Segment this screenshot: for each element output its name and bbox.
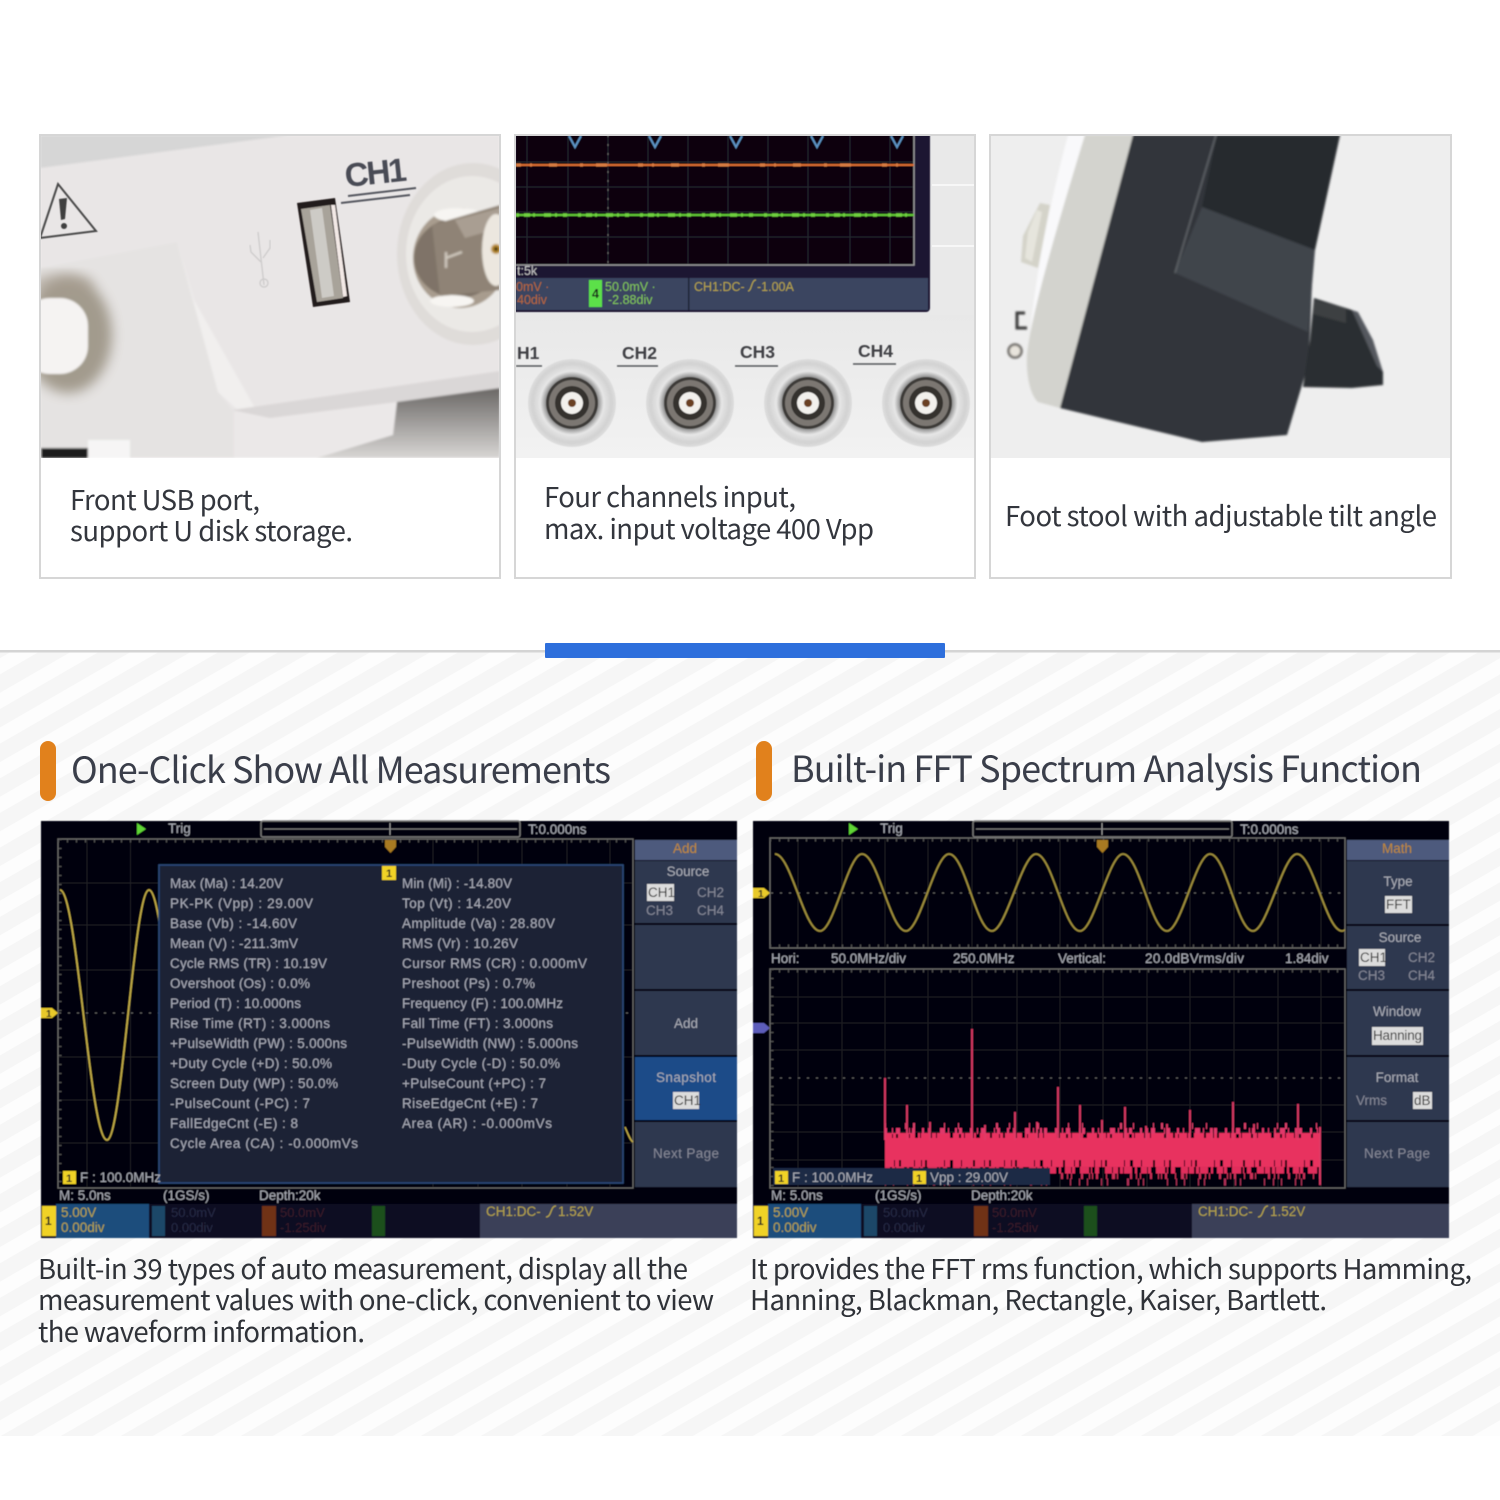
top status row: T:0.000ns (528, 822, 587, 837)
frequency readout: F : 100.0MHz (80, 1170, 161, 1185)
markers (753, 840, 1108, 1033)
caption: USB (70, 478, 353, 549)
description: measurements (38, 1247, 714, 1350)
description: measurements: measurement values with one-click, convenient to view (38, 1278, 714, 1318)
channel marker (41, 1008, 58, 1020)
FFT readout (773, 1168, 1050, 1185)
sample row: (1GS/s) (875, 1188, 922, 1203)
channel status bar: 1.52V (1270, 1204, 1305, 1219)
side menu: Math: Vrms (1356, 1093, 1387, 1108)
channel status bar: 1 (45, 1214, 52, 1228)
side menu: Math: Format (1376, 1070, 1419, 1085)
trigger marker (385, 840, 396, 853)
measurements: left column: +Duty Cycle (+D) : 50.0% (170, 1056, 332, 1071)
panel: foot stool (990, 135, 1451, 578)
measurements: left column: PK-PK (Vpp) : 29.00V (170, 896, 313, 911)
measurements: left column: Period (T) : 10.000ns (170, 996, 301, 1011)
description: measurements: Built-in 39 types of auto measurement, display all the (38, 1247, 688, 1287)
screen (510, 130, 930, 312)
side menu: Add: Add (674, 1016, 698, 1031)
measurement panel (159, 865, 623, 1183)
striped lower section (0, 652, 1500, 1436)
side menu: Math: Math (1382, 841, 1412, 856)
channel status bar: 1.52V (558, 1204, 593, 1219)
measurements: left column: Max (Ma) : 14.20V (170, 876, 283, 891)
side menu: Math: Next Page (1364, 1146, 1430, 1161)
description: FFT: It provides the FFT rms function, which supports Hamming, (750, 1247, 1472, 1287)
channel status bar: 0.00div (171, 1220, 213, 1235)
measurements: right column: +PulseCount (+PC) : 7 (402, 1076, 546, 1091)
measurements: left column: Base (Vb) : -14.60V (170, 916, 297, 931)
measurements: right column: -PulseWidth (NW) : 5.000ns (402, 1036, 578, 1051)
side menu: Math: Source (1379, 930, 1421, 945)
status readout (516, 264, 794, 307)
measurements: right column: Min (Mi) : -14.80V (402, 876, 512, 891)
waveform grid (58, 839, 633, 1188)
FFT readout: 1 (916, 1173, 922, 1185)
connector labels: CH2 (622, 343, 657, 363)
connector labels (516, 341, 896, 366)
status readout: 50.0mV · (605, 280, 656, 294)
measurements: right column: Area (AR) : -0.000mVs (402, 1116, 552, 1131)
frequency readout: 1 (66, 1173, 72, 1185)
measurements: right column: Amplitude (Va) : 28.80V (402, 916, 555, 931)
FFT scale row: Vertical: (1058, 951, 1106, 966)
channel status bar: 50.0mV (280, 1205, 325, 1220)
FFT scale row: Hori: (771, 951, 800, 966)
side menu: Add: CH2 (697, 885, 724, 900)
description: measurements: the waveform information. (38, 1310, 365, 1350)
measurements: right column: Preshoot (Ps) : 0.7% (402, 976, 535, 991)
measurements: left column: FallEdgeCnt (-E) : 8 (170, 1116, 298, 1131)
top status row (849, 821, 1299, 837)
caption: channels: max. input voltage 400 Vpp (544, 507, 874, 547)
side menu: Add: CH1 (648, 885, 675, 900)
USB socket (297, 198, 350, 307)
status readout: 0mV · (516, 280, 549, 294)
FFT readout: 1 (778, 1173, 784, 1185)
FFT scale row: 1.84div (1285, 951, 1329, 966)
top status row: Trig (168, 821, 191, 836)
status readout: -2.88div (608, 293, 653, 307)
caption: foot stool: Foot stool with adjustable tilt angle (1005, 494, 1437, 534)
side menu: Math: FFT (1386, 897, 1411, 912)
icon: USB symbol (250, 232, 270, 287)
screen: measurements (41, 821, 737, 1238)
side menu: Add: Snapshot (656, 1070, 716, 1085)
side menu: Add: Next Page (653, 1146, 719, 1161)
side menu: Add (635, 840, 737, 1187)
FFT scale row: 250.0MHz (953, 951, 1015, 966)
measurements: left column: -PulseCount (-PC) : 7 (170, 1096, 310, 1111)
measurements: right column: -Duty Cycle (-D) : 50.0% (402, 1056, 560, 1071)
sample row: M: 5.0ns (771, 1188, 823, 1203)
measurements: left column (170, 876, 358, 1151)
side menu: Add: Add (673, 841, 697, 856)
measurement panel: 1 (386, 868, 392, 880)
sample row (771, 1188, 1033, 1203)
upper waveform frame (770, 838, 1345, 948)
measurements: right column: Top (Vt) : 14.20V (402, 896, 511, 911)
side menu: Add: CH3 (646, 903, 673, 918)
connector labels: H1 (517, 343, 540, 363)
sample row: (1GS/s) (163, 1188, 210, 1203)
sample row: M: 5.0ns (59, 1188, 111, 1203)
measurements: right column: Fall Time (FT) : 3.000ns (402, 1016, 553, 1031)
channel status bar: 0.00div (883, 1220, 925, 1235)
orange trace (516, 164, 914, 166)
BNC connector (398, 164, 499, 344)
measurements: left column: Rise Time (RT) : 3.000ns (170, 1016, 330, 1031)
sine waveform (59, 888, 160, 1142)
panel: front USB port (39, 134, 501, 579)
connectors (528, 359, 970, 447)
label: CH1: CH1 (343, 151, 408, 194)
lower spectrum frame (770, 969, 1345, 1188)
markers: 1 (758, 889, 764, 900)
connector labels: CH4 (858, 341, 893, 361)
photo: side view with foot stool (990, 135, 1451, 458)
side menu: Math: dB (1414, 1093, 1431, 1108)
sine waveform (775, 854, 1370, 931)
top status row: Trig (880, 821, 903, 836)
caption: USB: Front USB port, (70, 478, 260, 518)
channel status bar: 0.00div (61, 1220, 105, 1235)
panel: four channels (510, 130, 975, 578)
side menu: Math: CH3 (1358, 968, 1385, 983)
measurements: left column: Mean (V) : -211.3mV (170, 936, 298, 951)
channel status bar: 5.00V (61, 1205, 96, 1220)
connector labels: CH3 (740, 342, 775, 362)
caption: channels (544, 475, 874, 547)
channel status bar: 1 (757, 1214, 764, 1228)
screen: FFT (753, 821, 1449, 1238)
channel status bar: 50.0mV (171, 1205, 216, 1220)
measurements: right column: RiseEdgeCnt (+E) : 7 (402, 1096, 538, 1111)
caption: channels: Four channels input, (544, 475, 796, 515)
measurements: left column: Cycle Area (CA) : -0.000mVs (170, 1136, 358, 1151)
side menu: Math: CH1 (1360, 950, 1387, 965)
channel status bar: 50.0mV (992, 1205, 1037, 1220)
measurements: left column: +PulseWidth (PW) : 5.000ns (170, 1036, 347, 1051)
side menu: Math: Hanning (1373, 1028, 1422, 1043)
FFT readout: Vpp : 29.00V (930, 1170, 1008, 1185)
channel marker: 1 (46, 1009, 52, 1020)
side menu: Math (1347, 840, 1449, 1187)
measurements: right column: RMS (Vr) : 10.26V (402, 936, 518, 951)
heading: measurements: One-Click Show All Measurements (71, 742, 611, 794)
status readout: t:5k (517, 264, 538, 278)
channel markers (569, 136, 903, 147)
caption: USB: support U disk storage. (70, 509, 353, 549)
side menu: Math: Type (1383, 874, 1413, 889)
top status row: T:0.000ns (1240, 822, 1299, 837)
green trace (516, 214, 914, 216)
FFT scale row: 50.0MHz/div (831, 951, 906, 966)
section divider (0, 643, 1500, 658)
channel status bar: CH1:DC- (1198, 1204, 1253, 1219)
side menu: Math: Window (1373, 1004, 1421, 1019)
channel status bar: 50.0mV (883, 1205, 928, 1220)
side menu: Add: CH4 (697, 903, 724, 918)
channel status bar: CH1:DC- (486, 1204, 541, 1219)
description: FFT (750, 1247, 1472, 1318)
photo: scope screen and inputs (510, 130, 975, 458)
status readout: -1.00A (757, 280, 794, 294)
channel status bar: 0.00div (773, 1220, 817, 1235)
measurements: right column: Frequency (F) : 100.0MHz (402, 996, 563, 1011)
side menu: Math: CH2 (1408, 950, 1435, 965)
top status row (137, 821, 587, 837)
side menu: Add: Source (667, 864, 709, 879)
status readout: CH1:DC- (694, 280, 745, 294)
heading: FFT: Built-in FFT Spectrum Analysis Function (791, 741, 1422, 793)
FFT scale row (771, 951, 1329, 966)
status readout: 40div (517, 293, 548, 307)
FFT scale row: 20.0dBVrms/div (1145, 951, 1244, 966)
FFT spectrum (885, 1029, 1320, 1185)
measurements: left column: Screen Duty (WP) : 50.0% (170, 1076, 338, 1091)
channel status bar: -1.25div (280, 1220, 327, 1235)
channel status bar (753, 1204, 1449, 1238)
measurements: left column: Cycle RMS (TR) : 10.19V (170, 956, 327, 971)
channel status bar: -1.25div (992, 1220, 1039, 1235)
sample row: Depth:20k (259, 1188, 321, 1203)
sample row (59, 1188, 321, 1203)
FFT readout: F : 100.0MHz (792, 1170, 873, 1185)
status readout: 4 (592, 287, 599, 301)
side menu: Add: CH1 (674, 1093, 701, 1108)
measurements: right column (402, 876, 587, 1131)
description: FFT: Hanning, Blackman, Rectangle, Kaiser, Bartlett. (750, 1278, 1327, 1318)
measurements: left column: Overshoot (Os) : 0.0% (170, 976, 310, 991)
icon: warning triangle (40, 184, 96, 238)
sample row: Depth:20k (971, 1188, 1033, 1203)
channel status bar: 5.00V (773, 1205, 808, 1220)
channel status bar (41, 1204, 737, 1238)
photo: USB port close-up (41, 136, 499, 458)
measurements: right column: Cursor RMS (CR) : 0.000mV (402, 956, 587, 971)
side menu: Math: CH4 (1408, 968, 1435, 983)
